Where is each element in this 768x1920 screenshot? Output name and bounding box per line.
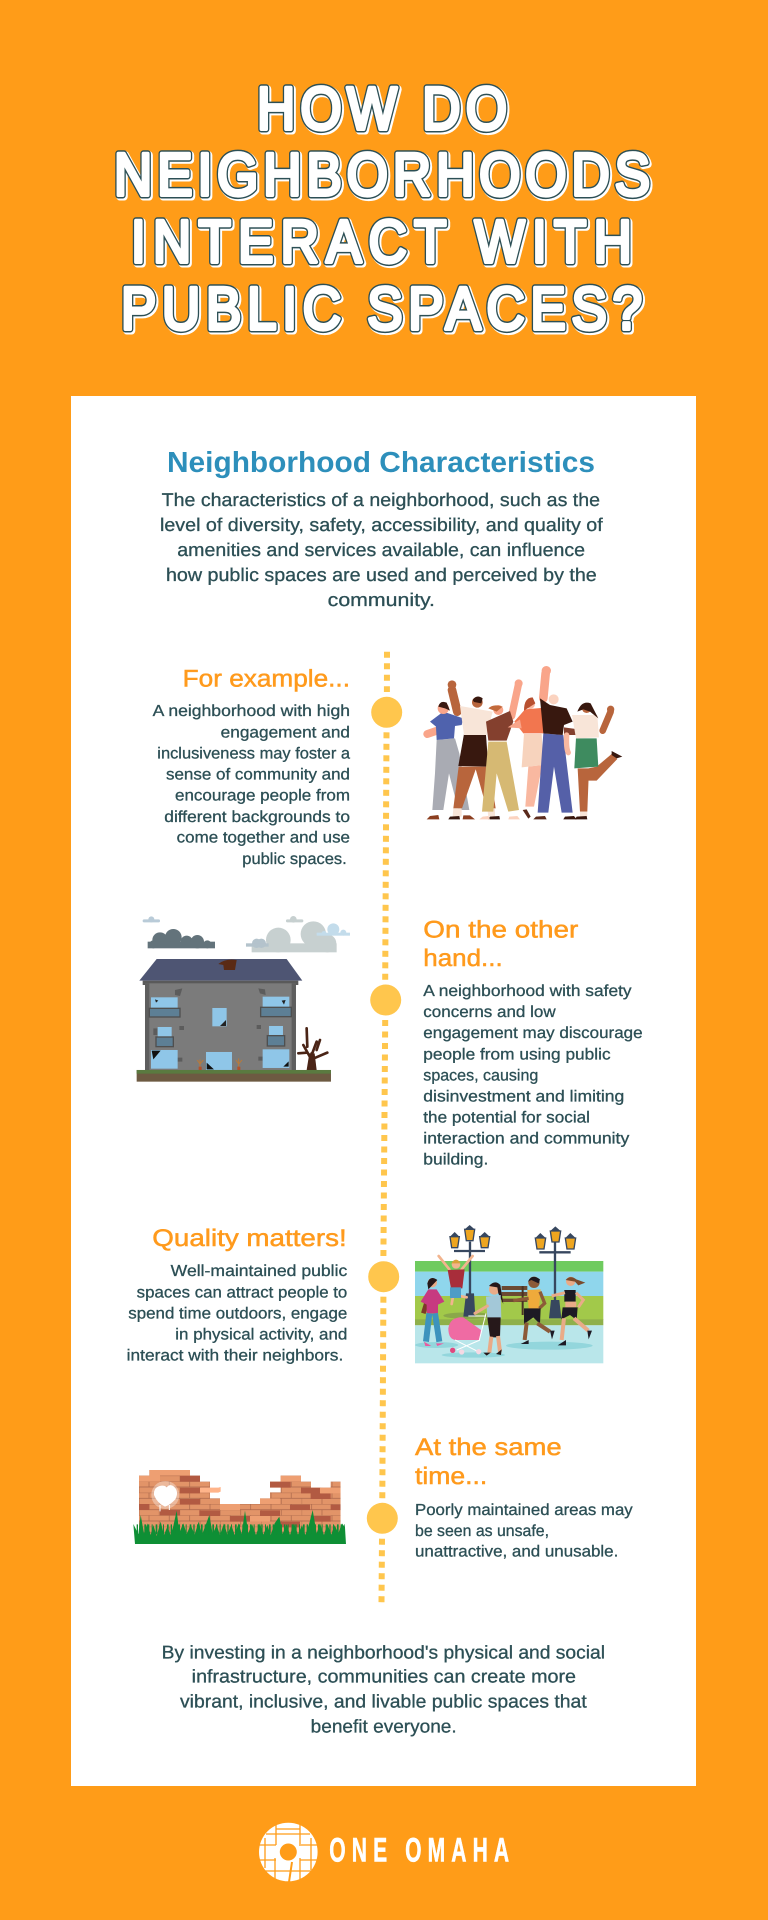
text block: at the same time: be seen as unsafe, [415, 1523, 549, 1540]
text block: quality matters [127, 1263, 347, 1364]
text block: conclusion: vibrant, inclusive, and livable public spaces that [180, 1691, 587, 1712]
heading: on the other hand: On the other [423, 916, 578, 943]
text block: on the other hand: people from using public [423, 1046, 611, 1063]
timeline: dotted line with circle markers [367, 652, 402, 1602]
text block: introduction [160, 489, 604, 610]
title: INTERACT WITH [132, 210, 633, 276]
title: PUBLIC SPACES? [121, 275, 642, 342]
heading: on the other hand: hand... [423, 945, 503, 972]
logo: one omaha wordmark: ONE OMAHA [329, 1832, 509, 1870]
text block: quality matters: Well-maintained public [171, 1263, 347, 1280]
text block: on the other hand: spaces, causing [423, 1067, 538, 1084]
text block: for example: public spaces. [242, 851, 347, 868]
text block: for example: come together and use [177, 830, 350, 847]
text block: for example: sense of community and [166, 766, 350, 783]
text block: introduction: level of diversity, safety, accessibility, and quality of [160, 514, 604, 535]
text block: at the same time: unattractive, and unusable. [415, 1544, 618, 1561]
heading: quality matters: Quality matters! [152, 1225, 347, 1252]
title: PUBLIC SPACES? [121, 275, 642, 342]
title: HOW DO [257, 75, 507, 142]
text block: conclusion: benefit everyone. [311, 1716, 457, 1737]
text block: on the other hand: interaction and community [423, 1130, 629, 1147]
text block: quality matters: in physical activity, and [175, 1326, 347, 1343]
text block: introduction: The characteristics of a neighborhood, such as the [162, 489, 600, 510]
illustration: people enjoying a park [415, 1225, 603, 1363]
text block: on the other hand: disinvestment and limiting [423, 1088, 624, 1105]
heading: at the same time: At the same [415, 1434, 562, 1461]
title: NEIGHBORHOODS [114, 141, 650, 208]
illustration: group of people waving [427, 666, 622, 819]
text block: at the same time: Poorly maintained areas may [415, 1502, 633, 1519]
heading: for example: For example... [183, 666, 350, 693]
text block: quality matters: spaces can attract people to [137, 1284, 347, 1301]
text block: introduction: how public spaces are used and perceived by the [166, 564, 597, 585]
text block: introduction: community. [328, 589, 435, 610]
text block: on the other hand: A neighborhood with safety [423, 983, 632, 1000]
logo: one omaha globe mark [258, 1823, 318, 1882]
panel: white content card [71, 396, 696, 1786]
text block: on the other hand: engagement may discourage [423, 1025, 643, 1042]
text block: for example: encourage people from [175, 788, 350, 805]
title [114, 75, 651, 344]
heading: neighborhood characteristics: Neighborhood Characteristics [167, 447, 595, 479]
heading: at the same time [415, 1434, 562, 1490]
text block: conclusion: infrastructure, communities can create more [192, 1666, 576, 1687]
title: HOW DO [257, 75, 507, 142]
illustration: crumbling brick wall with grass [133, 1468, 346, 1544]
text block: for example: A neighborhood with high [153, 703, 350, 720]
heading: at the same time: time... [415, 1463, 487, 1490]
text block: for example [153, 703, 350, 868]
text block: introduction: amenities and services available, can influence [177, 539, 585, 560]
heading: on the other hand [423, 916, 578, 972]
text block: for example: engagement and [221, 724, 350, 741]
text block: on the other hand [423, 983, 643, 1168]
title: PUBLIC SPACES? [122, 276, 643, 344]
text block: quality matters: interact with their neighbors. [127, 1347, 343, 1364]
text block: for example: different backgrounds to [164, 809, 350, 826]
text block: conclusion [162, 1641, 605, 1737]
title: HOW DO [258, 76, 508, 144]
text block: at the same time [415, 1502, 633, 1561]
text block: on the other hand: concerns and low [423, 1004, 556, 1021]
title: NEIGHBORHOODS [114, 141, 650, 208]
text block: on the other hand: building. [423, 1151, 488, 1168]
infographic canvas [71, 84, 696, 1882]
title: INTERACT WITH [131, 208, 632, 275]
title: NEIGHBORHOODS [116, 142, 651, 210]
illustration: damaged apartment building [137, 916, 350, 1082]
text block: on the other hand: the potential for social [423, 1109, 590, 1126]
text block: for example: inclusiveness may foster a [157, 745, 350, 762]
title: INTERACT WITH [131, 208, 632, 275]
text block: quality matters: spend time outdoors, engage [128, 1305, 347, 1322]
text block: conclusion: By investing in a neighborhood's physical and social [162, 1641, 605, 1662]
